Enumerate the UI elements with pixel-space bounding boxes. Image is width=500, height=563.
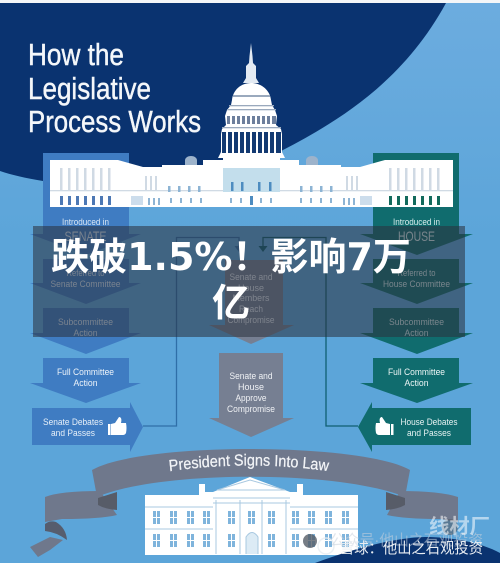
watermark logo <box>303 534 334 554</box>
white house portico <box>217 480 285 490</box>
title <box>28 37 201 139</box>
centre block windows <box>131 182 372 205</box>
watermark backdrop curve <box>315 537 500 563</box>
arrow: senate and house members reach compromise <box>209 260 294 344</box>
white house body <box>145 477 358 555</box>
arrow: referred to house committee <box>360 259 473 304</box>
upper windows <box>152 510 350 524</box>
arrow: full committee action: Full Committee <box>57 367 114 377</box>
title: How the <box>28 37 124 72</box>
white house <box>145 477 358 555</box>
arrow: house to compromise connector <box>258 238 358 426</box>
dome <box>218 83 285 158</box>
watermark: faint account line: 公众号·他山之石观投资 <box>330 532 483 549</box>
headline: 跌破1.5%！影响7万 <box>51 235 411 279</box>
background: navy arc <box>0 3 446 185</box>
arrow: senate and house approve compromise: Approve <box>236 393 266 403</box>
lower windows: house <box>389 196 440 205</box>
arrow: referred to senate committee: Referred to <box>66 268 104 278</box>
ribbon folds <box>98 492 117 510</box>
ribbon left notch <box>45 521 67 540</box>
arrow: senate and house members reach compromise: Senate and <box>230 272 272 282</box>
arrow: senate and house approve compromise: Senate and <box>230 371 272 381</box>
arrow: subcommittee action: Action <box>404 328 428 338</box>
arrow: senate to compromise connector <box>143 238 244 426</box>
dome statue and lantern <box>243 43 259 83</box>
arrow: full committee action <box>30 358 141 403</box>
arrow: introduced in house: HOUSE <box>398 228 435 244</box>
wing columns <box>50 168 453 191</box>
arrow: full committee action <box>360 358 473 403</box>
arrow: referred to senate committee <box>30 259 141 304</box>
arrow: referred to senate committee: Senate Committee <box>50 279 120 289</box>
arrow: referred to house committee: Referred to <box>398 268 436 278</box>
arrow: senate and house members reach compromise: Members <box>232 293 270 303</box>
icon: thumbs up <box>108 417 126 435</box>
arrow: introduced in senate: Introduced in <box>62 217 109 227</box>
capitol building <box>50 43 453 207</box>
ribbon right tail <box>387 491 458 522</box>
arrow: house debates and passes <box>358 402 471 452</box>
panel: house column <box>358 153 473 452</box>
ribbon label <box>190 466 363 471</box>
arrow: full committee action: Full Committee <box>388 367 445 377</box>
arrow: subcommittee action: Subcommittee <box>58 317 113 327</box>
small side domes <box>185 156 197 165</box>
arrow: referred to house committee: House Committee <box>383 279 450 289</box>
lower windows: senate <box>60 196 111 205</box>
icon: thumbs up <box>376 417 394 435</box>
arrow: introduced in senate <box>30 153 141 255</box>
arrow: senate and house approve compromise <box>209 353 294 437</box>
arrow: senate and house members reach compromise: Reach <box>239 304 263 314</box>
headline <box>51 235 411 325</box>
ribbon: president signs into law <box>30 449 458 557</box>
title: Legislative <box>28 71 151 106</box>
arrow: introduced in senate: SENATE <box>64 228 106 244</box>
arrow: senate debates and passes: and Passes <box>51 428 95 438</box>
arrow: senate and house members reach compromise: House <box>238 283 264 293</box>
headline: 亿 <box>212 281 250 325</box>
ribbon: president signs into law: President Signs Into Law <box>169 454 330 472</box>
arrow: full committee action: Action <box>404 378 428 388</box>
arrow: senate and house members reach compromise: Compromise <box>228 315 274 325</box>
arrow: subcommittee action <box>30 308 141 354</box>
lower windows <box>152 533 350 547</box>
capitol wings <box>50 158 453 207</box>
arrow: introduced in house: Introduced in <box>393 217 440 227</box>
capitol centre portico <box>223 168 280 192</box>
arrow: house debates and passes: House Debates <box>400 417 458 427</box>
arrow: subcommittee action: Subcommittee <box>389 317 444 327</box>
panel: senate column <box>30 153 143 452</box>
door <box>246 532 258 554</box>
arrow: subcommittee action <box>360 308 473 354</box>
headline overlay band <box>33 226 465 337</box>
arrow: senate and house approve compromise: Compromise <box>227 404 275 414</box>
arrow: senate debates and passes: Senate Debates <box>43 417 103 427</box>
arrow: subcommittee action: Action <box>74 328 98 338</box>
arrow: senate debates and passes <box>32 402 143 452</box>
ribbon main arc <box>92 449 410 497</box>
watermark: brand: 线材厂 <box>429 515 490 538</box>
ribbon left tail <box>45 491 117 522</box>
watermark: source: 雪球：他山之石观投资 <box>340 540 483 557</box>
arrow: introduced in house <box>360 153 473 255</box>
title: Process Works <box>28 104 201 139</box>
arrow: senate and house approve compromise: House <box>238 382 264 392</box>
arrow: house debates and passes: and Passes <box>407 428 451 438</box>
arrow: full committee action: Action <box>74 378 98 388</box>
